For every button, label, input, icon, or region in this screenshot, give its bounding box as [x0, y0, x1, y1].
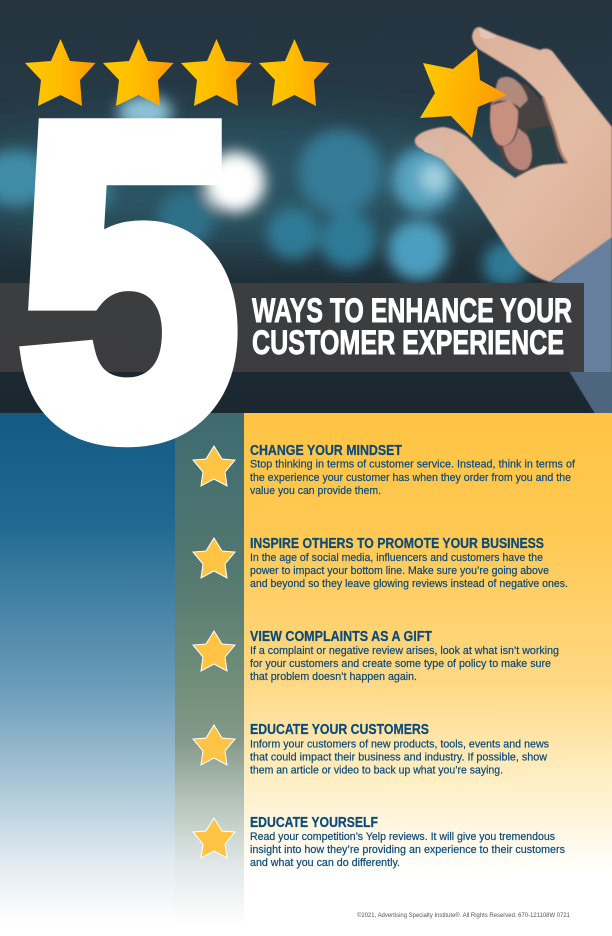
tip 1 body: value you can provide them. [250, 485, 381, 497]
blurred bokeh lights [0, 95, 527, 286]
tip 2 body: In the age of social media, influencers and customers have the [250, 552, 543, 564]
tip 4 body: them an article or video to back up what you’re saying. [250, 764, 503, 776]
rating stars row [25, 39, 330, 106]
tip 5 body: Read your competition’s Yelp reviews. It will give you tremendous [250, 831, 556, 843]
tip 5 body: insight into how they’re providing an experience to their customers [250, 844, 566, 856]
tip 3 body: that problem doesn’t happen again. [250, 671, 417, 683]
tip 3 [193, 629, 559, 683]
tip 1 [193, 443, 576, 497]
tip 2 body: and beyond so they leave glowing reviews instead of negative ones. [250, 578, 568, 590]
tip 4 body: Inform your customers of new products, tools, events and news [250, 738, 550, 750]
hand: inside shadow [490, 77, 560, 175]
tip 5 body [250, 831, 566, 869]
tip 1 body: Stop thinking in terms of customer service. Instead, think in terms of [250, 458, 576, 470]
tip 3 body: for your customers and create some type of policy to make sure [250, 658, 551, 670]
tip 2 body: power to impact your bottom line. Make sure you’re going above [250, 565, 549, 577]
star 1 [25, 39, 96, 106]
dark title band [0, 283, 584, 372]
tip 3 body: If a complaint or negative review arises, look at what isn’t working [250, 645, 559, 657]
tip 1 heading: CHANGE YOUR MINDSET [250, 443, 402, 459]
tip 3 heading: VIEW COMPLAINTS AS A GIFT [250, 629, 432, 645]
tip 5 star [193, 818, 235, 858]
tip 4 body [250, 738, 550, 776]
star 2 [103, 39, 174, 106]
background haze [0, 123, 530, 247]
tip 3 star [193, 631, 235, 671]
big number 5: 5 [18, 34, 239, 526]
tip 2 [193, 536, 568, 590]
tip 4 body: that could impact their business and industry. If possible, show [250, 752, 547, 764]
tip 2 star [193, 538, 235, 578]
tip 1 star [193, 446, 235, 486]
star 4 [259, 39, 330, 106]
tip 4 star [193, 725, 235, 765]
tip 5 heading: EDUCATE YOURSELF [250, 815, 378, 831]
tip 2 heading: INSPIRE OTHERS TO PROMOTE YOUR BUSINESS [250, 536, 544, 552]
hand: palm, thumb and index finger [415, 27, 612, 282]
finger crease shading [543, 97, 567, 163]
lower background columns [0, 413, 612, 936]
sleeve [550, 234, 612, 413]
star held in hand [420, 49, 507, 138]
tip 5 body: and what you can do differently. [250, 857, 400, 869]
tip 1 body [250, 458, 576, 497]
star 3 [181, 39, 252, 106]
fingernails [479, 28, 498, 39]
tip 3 body [250, 645, 559, 683]
tip 5 [193, 815, 566, 869]
tip 4 [193, 722, 550, 776]
hero photo background [0, 0, 612, 413]
tip 4 heading: EDUCATE YOUR CUSTOMERS [250, 722, 429, 738]
tip 2 body [250, 552, 568, 590]
title [252, 292, 572, 362]
tip 1 body: the experience your customer has when they order from you and the [250, 472, 571, 484]
copyright footer: ©2021, Advertising Specialty Institute®. All Rights Reserved. 670-121108W 0721 [357, 912, 571, 919]
hand: back fingers [491, 77, 528, 108]
